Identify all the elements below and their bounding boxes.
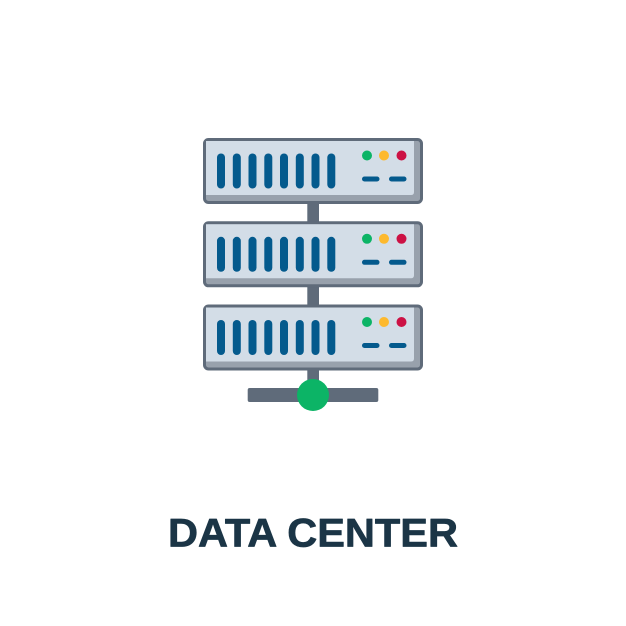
network node	[297, 379, 329, 411]
server unit 2	[204, 223, 422, 286]
title: DATA CENTER	[168, 512, 458, 556]
icon: data center server rack	[204, 140, 422, 411]
server unit 1	[204, 140, 422, 202]
server unit 3	[204, 306, 422, 369]
network base bar	[248, 388, 378, 402]
network connectors	[307, 203, 319, 389]
